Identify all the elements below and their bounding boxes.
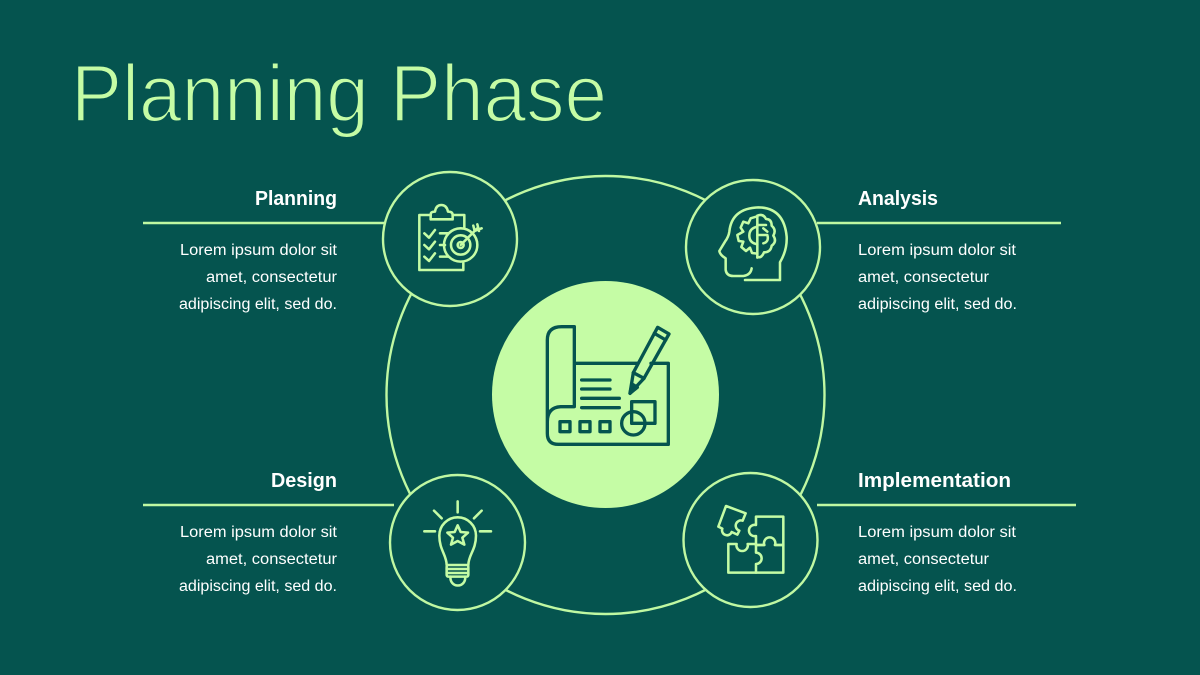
icon: light bulb with star <box>390 475 525 610</box>
text: Planning body: amet, consectetur <box>206 269 337 286</box>
outer ring <box>386 176 824 614</box>
icon: head with gear and brain <box>686 180 820 314</box>
icon: puzzle pieces <box>684 473 818 607</box>
panel: Analysis <box>817 188 1061 313</box>
heading: Analysis: Analysis <box>858 188 938 210</box>
text: Implementation body <box>858 524 1017 595</box>
text: Planning body: Lorem ipsum dolor sit <box>180 242 338 259</box>
panel: Implementation <box>817 470 1076 595</box>
heading: Implementation: Implementation <box>858 470 1011 492</box>
icon: clipboard with target <box>383 172 517 306</box>
text: Analysis body: adipiscing elit, sed do. <box>858 296 1017 313</box>
text: Implementation body: amet, consectetur <box>858 551 989 568</box>
centre disc with blueprint icon <box>492 281 719 508</box>
text: Implementation body: Lorem ipsum dolor sit <box>858 524 1017 541</box>
text: Analysis body <box>858 242 1017 313</box>
panel: Design <box>143 470 394 595</box>
text: Planning body <box>179 242 338 313</box>
heading: Design: Design <box>271 470 337 492</box>
text: Analysis body: Lorem ipsum dolor sit <box>858 242 1017 259</box>
heading: Planning: Planning <box>255 188 337 210</box>
panel: Planning <box>143 188 386 313</box>
text: Design body: amet, consectetur <box>206 551 337 568</box>
text: Design body: Lorem ipsum dolor sit <box>180 524 338 541</box>
text: Implementation body: adipiscing elit, sed do. <box>858 578 1017 595</box>
text: Analysis body: amet, consectetur <box>858 269 989 286</box>
text: Planning body: adipiscing elit, sed do. <box>179 296 337 313</box>
text: Design body: adipiscing elit, sed do. <box>179 578 337 595</box>
title: Planning Phase <box>71 49 607 139</box>
text: Design body <box>179 524 338 595</box>
